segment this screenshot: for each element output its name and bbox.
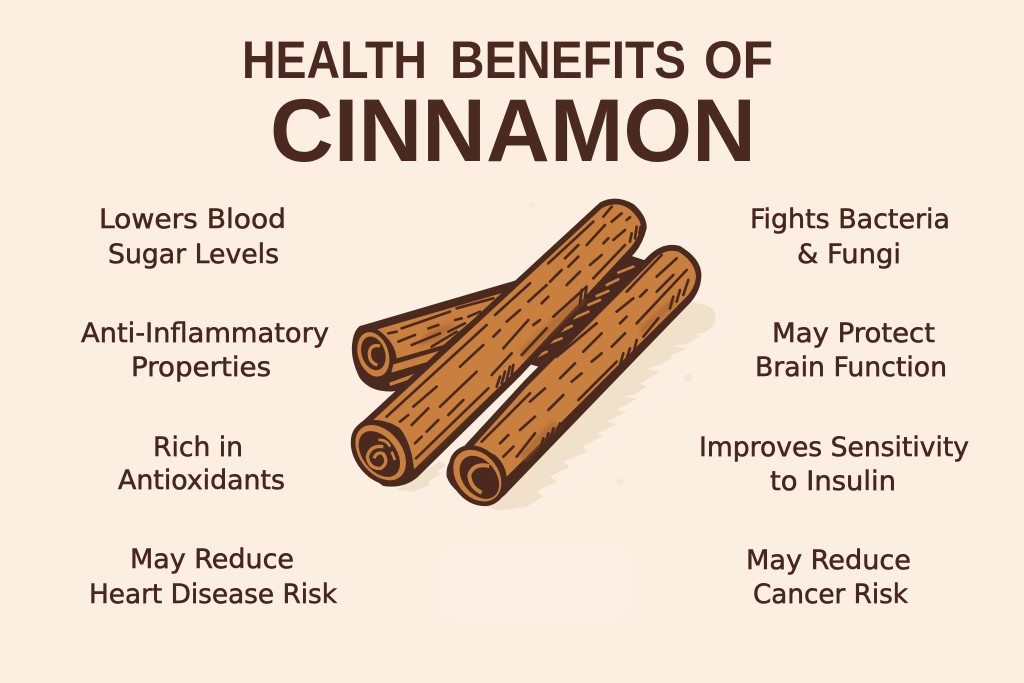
benefit: blood sugar bbox=[99, 204, 286, 270]
benefit: insulin sensitivity: to Insulin bbox=[770, 466, 896, 497]
benefits list: right column bbox=[699, 204, 969, 610]
benefit: anti-inflammatory bbox=[81, 318, 329, 383]
benefit: antioxidants bbox=[118, 432, 285, 496]
benefit: brain function: May Protect bbox=[772, 318, 935, 349]
benefit: antioxidants: Antioxidants bbox=[118, 465, 285, 496]
benefit: blood sugar: Sugar Levels bbox=[108, 239, 279, 270]
benefit: heart disease bbox=[89, 544, 337, 610]
benefit: insulin sensitivity bbox=[699, 432, 969, 497]
benefit: cancer risk: Cancer Risk bbox=[753, 579, 908, 610]
benefit: anti-inflammatory: Anti-Inflammatory bbox=[81, 318, 329, 349]
far section of back stick with braid marks bbox=[527, 256, 646, 367]
middle stick end spiral bbox=[342, 412, 420, 493]
benefit: bacteria and fungi bbox=[750, 204, 950, 270]
benefit: anti-inflammatory: Properties bbox=[131, 352, 271, 383]
benefit: bacteria and fungi: Fights Bacteria bbox=[750, 204, 950, 235]
benefit: heart disease: May Reduce bbox=[130, 544, 294, 575]
back stick end spiral bbox=[349, 325, 398, 383]
title: OF bbox=[704, 31, 773, 90]
title: BENEFITS bbox=[450, 31, 686, 90]
benefit: blood sugar: Lowers Blood bbox=[99, 204, 286, 235]
front stick end spiral bbox=[440, 437, 515, 514]
title: HEALTH bbox=[242, 31, 427, 90]
benefit: brain function bbox=[755, 318, 947, 383]
front right stick bbox=[440, 245, 701, 514]
benefit: bacteria and fungi: & Fungi bbox=[797, 239, 901, 270]
title bbox=[242, 31, 773, 180]
benefit: cancer risk bbox=[746, 545, 911, 610]
middle stick bbox=[342, 199, 647, 493]
benefit: insulin sensitivity: Improves Sensitivity bbox=[699, 432, 969, 463]
benefit: brain function: Brain Function bbox=[755, 352, 947, 383]
title: CINNAMON bbox=[270, 80, 756, 180]
benefit: antioxidants: Rich in bbox=[153, 432, 243, 463]
back stick bbox=[349, 281, 547, 391]
illustration: cinnamon sticks bbox=[342, 199, 716, 514]
benefit: cancer risk: May Reduce bbox=[746, 545, 911, 576]
benefit: heart disease: Heart Disease Risk bbox=[89, 579, 337, 610]
benefits list: left column bbox=[81, 204, 337, 610]
shadow under sticks bbox=[397, 203, 716, 511]
